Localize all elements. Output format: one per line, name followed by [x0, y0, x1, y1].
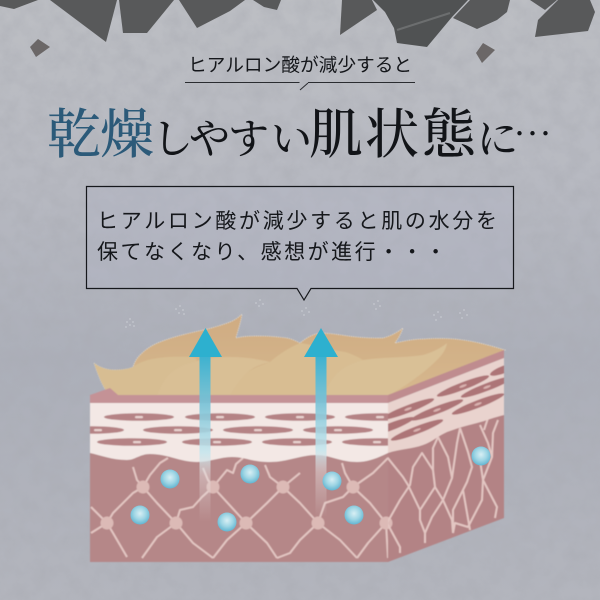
dermis front face [90, 440, 388, 562]
title: い [271, 116, 312, 162]
title: す [228, 116, 269, 162]
sparkle dots rising from skin [125, 299, 468, 328]
title: や [189, 116, 230, 162]
decoration: dark rock shards [0, 0, 595, 63]
title: 態 [422, 105, 478, 165]
title: 肌 [309, 105, 363, 165]
arrow: moisture escaping right [304, 328, 338, 517]
white band front [90, 403, 388, 462]
pink top band side [388, 350, 504, 403]
fat cells side [387, 365, 504, 442]
collagen network side [387, 418, 498, 553]
flaking stratum corneum [94, 314, 505, 396]
upper pink sliver left [90, 388, 118, 395]
water droplets [130, 446, 490, 532]
callout box with text: 保てなくなり、感想が進行・・・ [97, 241, 449, 264]
dermis side face [388, 395, 504, 562]
collagen network front [91, 458, 388, 558]
pale band side [388, 358, 504, 453]
title [47, 104, 552, 165]
pink top band front [90, 395, 388, 403]
title: し [152, 116, 193, 162]
callout box with text [86, 186, 514, 300]
title: 燥 [100, 105, 154, 165]
callout box with text: ヒアルロン酸が減少すると肌の水分を [97, 210, 500, 233]
subtitle with speech underline: ヒアルロン酸が減少すると [188, 54, 412, 76]
title: に [477, 116, 518, 162]
title: 状 [365, 105, 419, 165]
title: 乾 [47, 105, 101, 165]
fat cells front [90, 412, 389, 446]
arrow: moisture escaping left [189, 328, 222, 522]
subtitle with speech underline [185, 54, 415, 90]
title: … [513, 104, 552, 160]
skin cross-section illustration [60, 314, 521, 562]
collagen nodes [100, 480, 392, 530]
